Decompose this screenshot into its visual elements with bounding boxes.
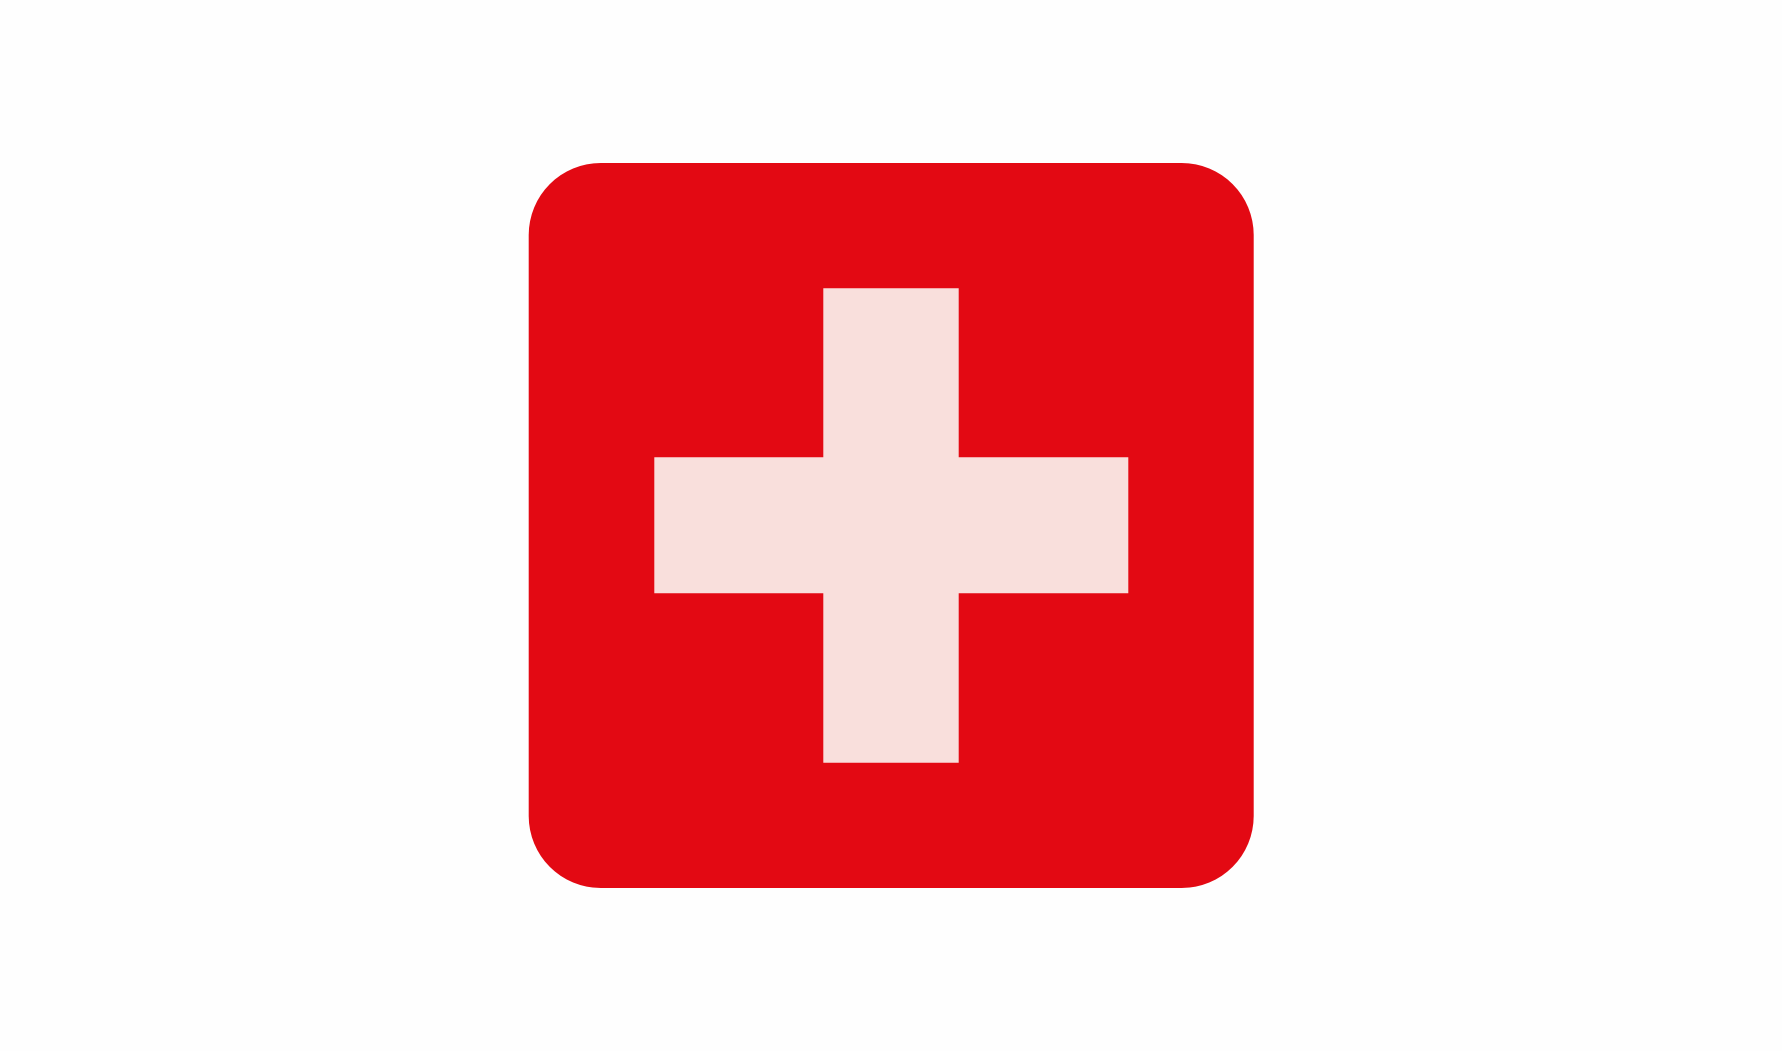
icon glyph: pale pink cross [654, 288, 1128, 763]
icon background: red rounded square [529, 163, 1254, 888]
